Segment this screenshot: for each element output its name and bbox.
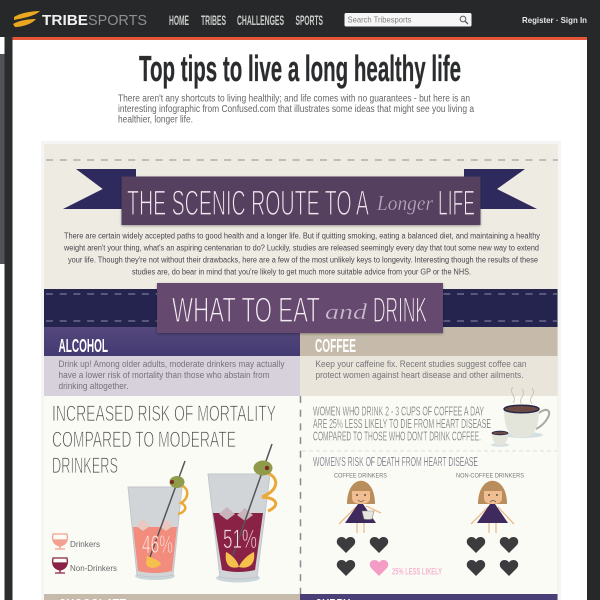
legend <box>53 534 117 573</box>
main title banner: THE SCENIC ROUTE TO A <box>127 184 369 223</box>
glass: non-drinkers 51% <box>208 444 276 582</box>
figure: non-coffee drinker <box>471 481 514 533</box>
panel: alcohol header: ALCOHOL <box>58 336 108 356</box>
ribbon tails <box>63 169 537 209</box>
navigation: HOME <box>169 12 189 28</box>
site header bar <box>0 0 600 40</box>
search box: Search Tribesports <box>348 14 412 24</box>
navy band <box>44 289 558 327</box>
alcohol text block: Drink up! Among older adults, moderate drinkers may actually <box>58 359 285 369</box>
section banner: what to eat and drink <box>157 283 443 333</box>
intro text <box>118 94 474 126</box>
coffee statement <box>313 404 491 444</box>
label: non-coffee drinkers: NON-COFFEE DRINKERS <box>456 472 525 480</box>
logo <box>13 11 147 29</box>
introduction paragraph: There are certain widely accepted paths to good health and a longer life. But if quitting smoking, eating a balanced diet, and maintaining a healthy <box>64 232 540 240</box>
site header bar: SPORTS <box>296 12 323 28</box>
alcohol text block <box>44 356 300 396</box>
introduction paragraph <box>63 232 540 276</box>
glass: drinkers 46%: 46% <box>142 531 173 559</box>
hearts: coffee drinkers <box>337 537 388 576</box>
section banner: what to eat and drink: DRINK <box>373 291 427 330</box>
alcohol text block: have a lower risk of mortality than those who abstain from <box>58 370 270 380</box>
legend: Drinkers <box>70 540 100 549</box>
introduction paragraph: weight aren't your thing, what's an aspiring centenarian to do? Luckily, studies are released seemingly every day that tout some new way to extend <box>63 244 539 252</box>
coffee text block: Keep your caffeine fix. Recent studies suggest coffee can <box>316 359 527 369</box>
logo: TRIBE <box>42 12 88 29</box>
panel: alcohol header <box>44 327 300 356</box>
section banner: what to eat and drink: WHAT TO EAT <box>172 291 320 330</box>
panel: mortality chart <box>44 396 300 594</box>
panel: chocolate header <box>44 594 300 600</box>
legend: Non-Drinkers <box>70 564 117 573</box>
intro text: interesting infographic from Confused.com that illustrates some ideas that might see you living a <box>118 104 474 115</box>
main title banner <box>122 176 480 225</box>
label: coffee drinkers: COFFEE DRINKERS <box>334 472 388 480</box>
navigation: CHALLENGES <box>237 12 284 28</box>
main title banner: LIFE <box>438 184 475 223</box>
coffee text block: protect women against heart disease and other ailments. <box>316 370 524 380</box>
callout: 25% less likely: 25% LESS LIKELY <box>392 566 442 576</box>
logo: SPORTS <box>88 12 147 29</box>
hearts: non-coffee drinkers <box>467 537 518 576</box>
intro text: healthier, longer life. <box>118 114 193 126</box>
chart heading: COMPARED TO MODERATE <box>52 427 236 452</box>
chart heading <box>52 401 276 478</box>
infographic background <box>41 141 561 600</box>
panel: coffee header <box>300 327 558 356</box>
navigation <box>169 12 323 28</box>
search box <box>344 13 472 26</box>
icon: coffee cups <box>491 387 549 447</box>
intro text: There aren't any shortcuts to living healthily; and life comes with no guarantees - but here is an <box>118 94 470 104</box>
panel: coffee and heart disease <box>300 387 558 594</box>
chart heading: INCREASED RISK OF MORTALITY <box>52 401 276 426</box>
glass: drinkers 46% <box>128 461 187 580</box>
alcohol text block: drinking altogether. <box>58 381 128 391</box>
introduction paragraph: studies are, do bear in mind that you're likely to get much more suitable advice from your GP or the NHS. <box>132 268 471 276</box>
navigation: TRIBES <box>201 12 226 28</box>
section banner: what to eat and drink: and <box>325 299 368 324</box>
introduction paragraph: your life. Though they're not without their drawbacks, here are a few of the most unlikely keys to longevity. Interesting though the results of these <box>68 256 539 264</box>
panel: coffee header: COFFEE <box>315 336 356 356</box>
chart heading: DRINKERS <box>52 453 118 478</box>
panel: next topic header <box>300 594 558 600</box>
account links: Register · Sign In <box>522 15 587 25</box>
figure: coffee drinker <box>339 481 381 533</box>
glass: non-drinkers 51%: 51% <box>223 524 257 554</box>
main title banner: Longer <box>376 191 434 215</box>
coffee text block <box>300 356 558 396</box>
